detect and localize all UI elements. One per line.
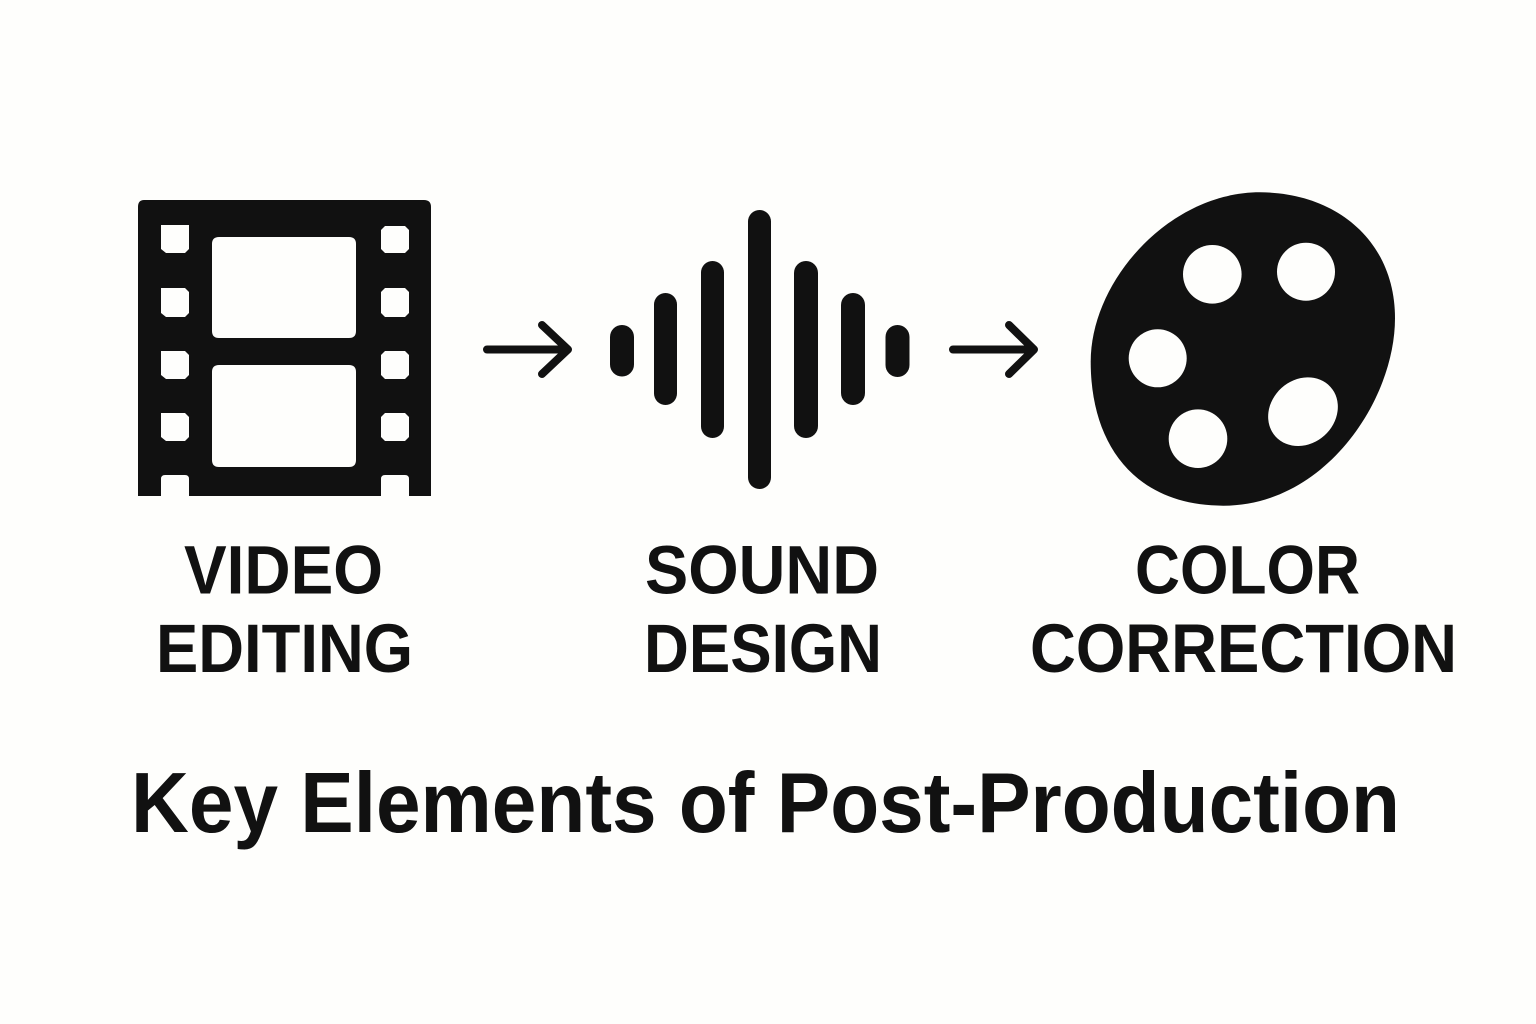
label: sound design: DESIGN [644,610,882,687]
arrow: sound design to color correction [953,325,1034,374]
label: color correction: CORRECTION [1030,610,1457,687]
label: sound design: SOUND [645,532,879,608]
label: video editing: VIDEO [184,532,383,608]
icon: color palette [1091,192,1395,506]
title: Key Elements of Post-Production [131,756,1400,851]
label: video editing [156,532,413,687]
icon: film strip [138,200,431,496]
icon: sound waveform [610,210,910,489]
label: color correction: COLOR [1135,532,1360,608]
label: color correction [1030,532,1457,687]
label: sound design [644,532,882,687]
label: video editing: EDITING [156,610,413,687]
arrow: video editing to sound design [487,325,568,374]
